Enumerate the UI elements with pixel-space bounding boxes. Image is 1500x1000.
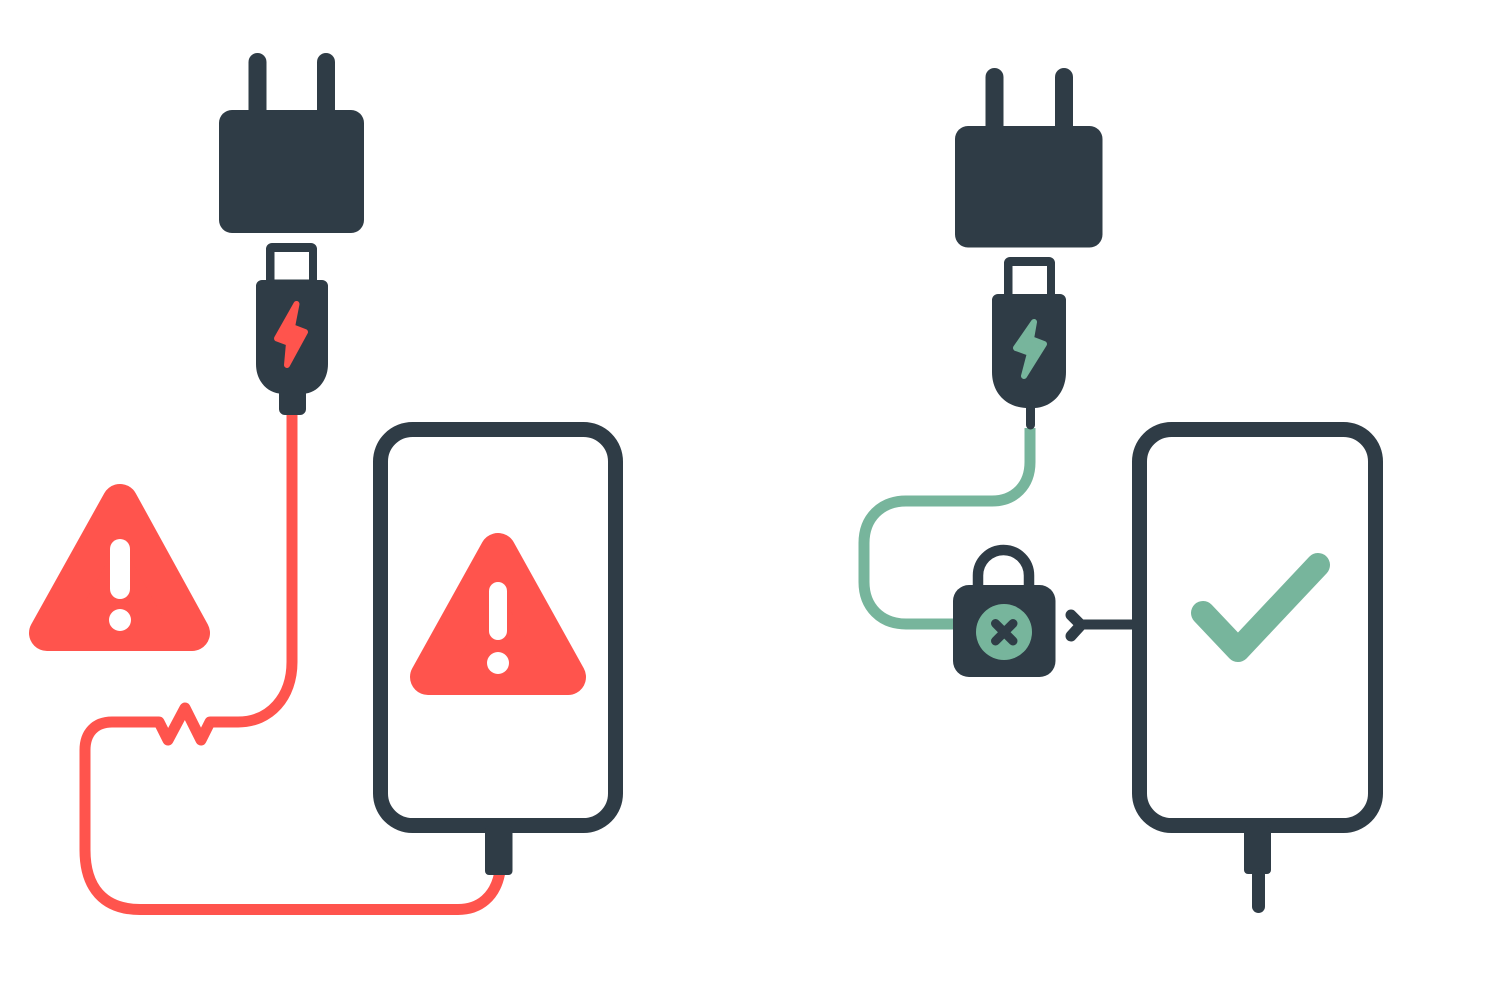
cable: damaged red wire bbox=[85, 412, 500, 910]
icon: green lightning bolt bbox=[1016, 322, 1044, 376]
icon: wall plug adapter, left bbox=[219, 53, 364, 233]
cable: green wire into lock bbox=[864, 428, 1030, 624]
icon: wall plug adapter, right bbox=[955, 68, 1102, 248]
icon: phone outline, left bbox=[380, 430, 616, 875]
icon: green check mark bbox=[1203, 565, 1318, 650]
icon: USB connector with green bolt bbox=[992, 257, 1066, 430]
icon: red lightning bolt bbox=[277, 304, 305, 365]
panel: unsafe charging bbox=[47, 53, 616, 910]
icon: USB connector with red bolt bbox=[256, 243, 328, 415]
panel: protected charging bbox=[864, 68, 1376, 913]
icon: floating warning triangle bbox=[47, 502, 192, 633]
icon: warning triangle on phone bbox=[428, 551, 568, 677]
icon: disconnected fork connector bbox=[1071, 615, 1135, 636]
icon: phone outline, right bbox=[1140, 430, 1376, 913]
icon: padlock with X bbox=[953, 550, 1056, 677]
